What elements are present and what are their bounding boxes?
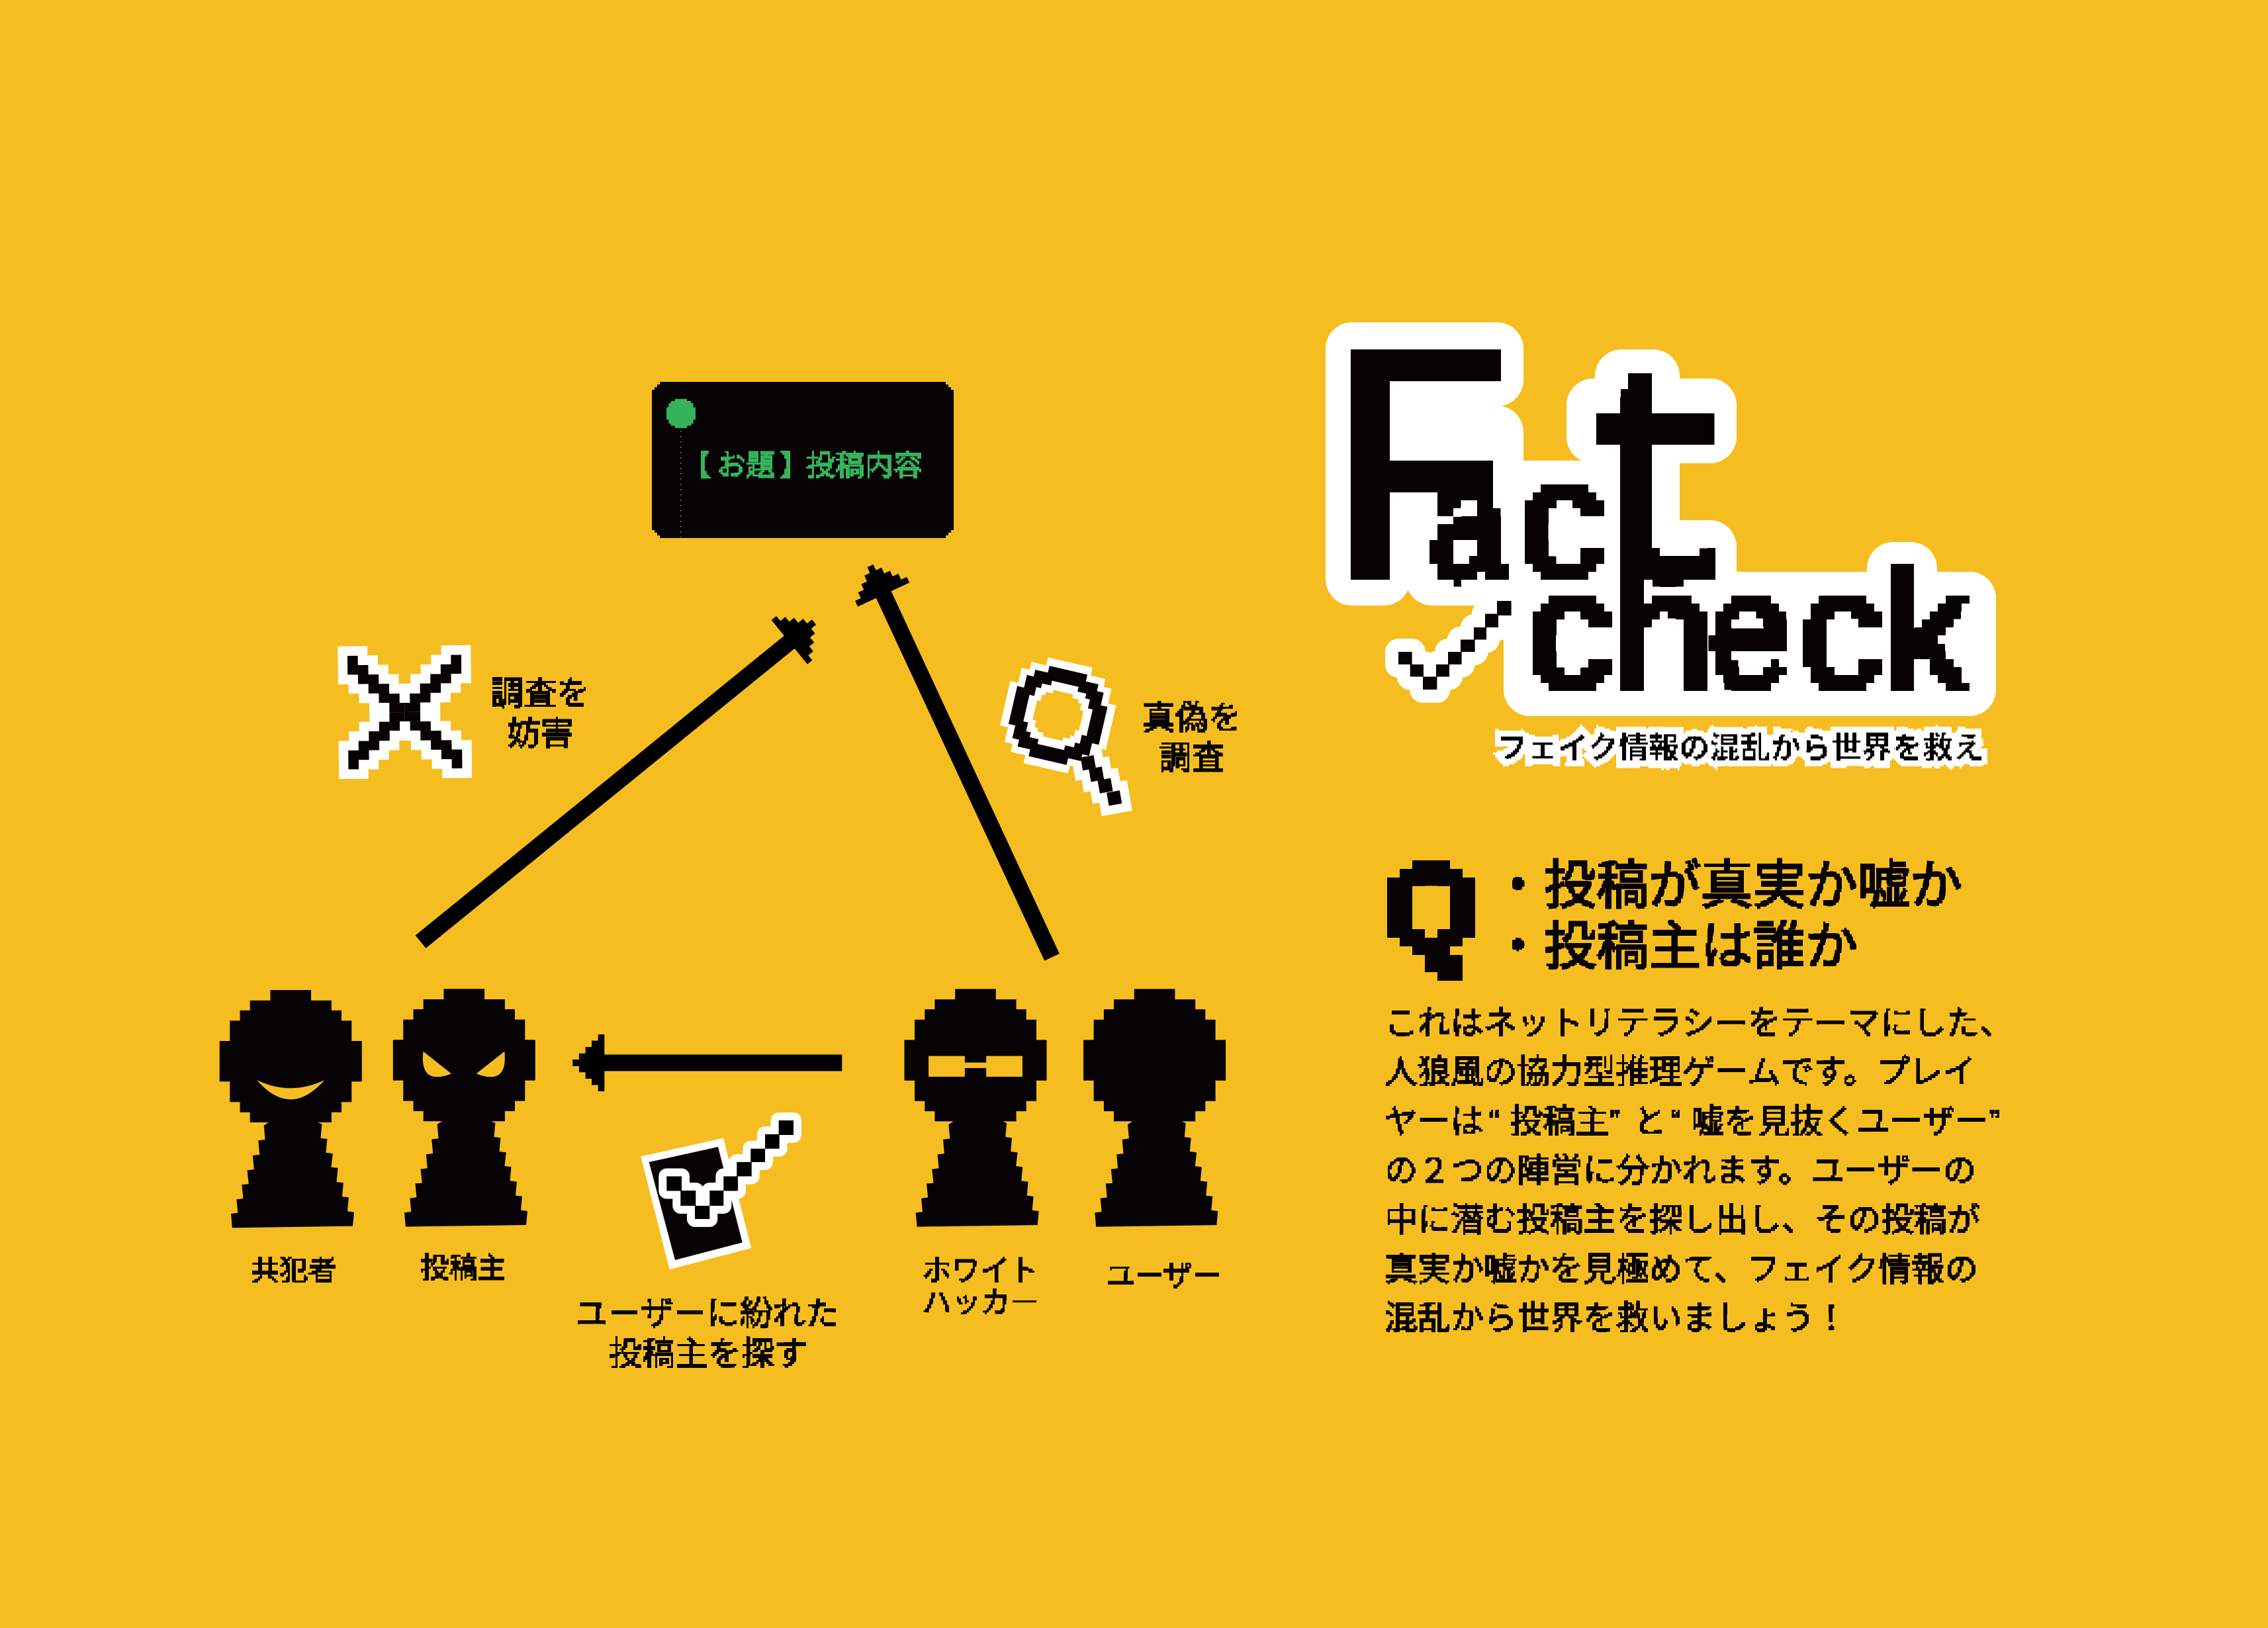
title word: check: h [1605,550,1722,740]
icon: magnifying glass [993,651,1123,806]
pawn: white hacker [904,989,1047,1227]
icon letter Q: Q [1382,840,1478,977]
text block: game description [1384,1005,2013,1337]
label: find the poster among users [574,1295,839,1373]
post label: 】 [780,449,809,482]
title word: Fact: t [1572,331,1743,668]
title word: Fact: a [1427,437,1510,629]
angry eyes [423,1052,505,1077]
icon: X obstruct [347,655,462,770]
text block: game description: 中に潜む投稿主を探し出し、その投稿が [1384,1201,1980,1238]
title word: check [1523,548,1975,741]
label: white hacker [922,1255,1039,1319]
text block: game description: ヤーは [1384,1103,1484,1140]
title: Fact check logo [1326,290,1975,741]
title word: check: e [1705,548,1794,739]
pawn: poster [393,989,535,1227]
label: investigate truth [1142,700,1242,776]
pawn: accomplice [220,990,362,1228]
post label: 投稿内容 [806,449,923,482]
label: obstruct investigation [491,675,590,752]
green status dot [666,399,696,428]
text block: game description: の２つの陣営に分かれます。ユーザーの [1384,1152,1976,1189]
text block: game description: これはネットリテラシーをテーマにした、 [1384,1005,2013,1042]
dotted line [680,431,682,537]
subtitle: フェイク情報の混乱から世界を救え [1497,731,1983,765]
question line 2: ・投稿主は誰か [1492,917,1858,975]
post label: お [717,449,746,482]
title word: Fact [1326,290,1743,684]
post label: 題 [746,449,775,482]
check [666,1120,794,1219]
label: accomplice: 共犯者 [251,1255,336,1287]
label: white hacker: ハッカー [923,1287,1039,1319]
text block: game description: 人狼風の協力型推理ゲームです。プレイ [1384,1054,1976,1091]
text block: game description: 真実か嘘かを見極めて、フェイク情報の [1384,1251,1977,1288]
checkmark icon [1398,601,1512,690]
label: obstruct investigation: 調査を [491,675,590,712]
title word: Fact: F [1326,290,1520,684]
text block: game description: と [1633,1103,1666,1140]
title word: check: c [1523,548,1620,739]
text block: game description: 嘘を見抜くユーザー [1691,1103,1988,1140]
label: investigate truth: 真偽を [1142,700,1242,737]
text block: game description: “ [1489,1103,1500,1140]
label: user: ユーザー [1105,1260,1222,1292]
pawn: user [1083,989,1226,1227]
question line 1: ・投稿が真実か嘘か [1492,856,1962,915]
arrow: white hacker to post [844,554,1078,969]
title word: Fact: c [1516,437,1613,629]
title word: check: k [1879,551,1975,741]
post label: 【 [682,449,711,482]
panel: post card [652,382,954,538]
text block: game description: “ [1670,1103,1682,1140]
arrow: white hacker to poster [572,1034,842,1091]
panel: question [1382,840,1962,977]
label: obstruct investigation: 妨害 [507,715,573,752]
sunglasses [929,1056,1022,1077]
icon: card with check [643,1120,794,1268]
text block: game description: 混乱から世界を救いましょう！ [1384,1300,1848,1337]
check halo [666,1120,794,1219]
text block: game description: ” [1989,1103,2001,1140]
arrow: accomplice to post [402,600,832,964]
text block: game description: 投稿主 [1510,1103,1609,1140]
title word: check: c [1796,549,1891,739]
card background [652,382,954,538]
label: find the poster among users: 投稿主を探す [609,1335,807,1373]
card [643,1140,750,1268]
label: investigate truth: 調査 [1159,739,1225,776]
smile [257,1080,324,1099]
label: find the poster among users: ユーザーに紛れた [574,1295,839,1332]
title white halo [1352,349,1970,690]
label: white hacker: ホワイト [922,1255,1038,1287]
text block: game description: ” [1609,1103,1620,1140]
label: poster: 投稿主 [421,1253,506,1285]
